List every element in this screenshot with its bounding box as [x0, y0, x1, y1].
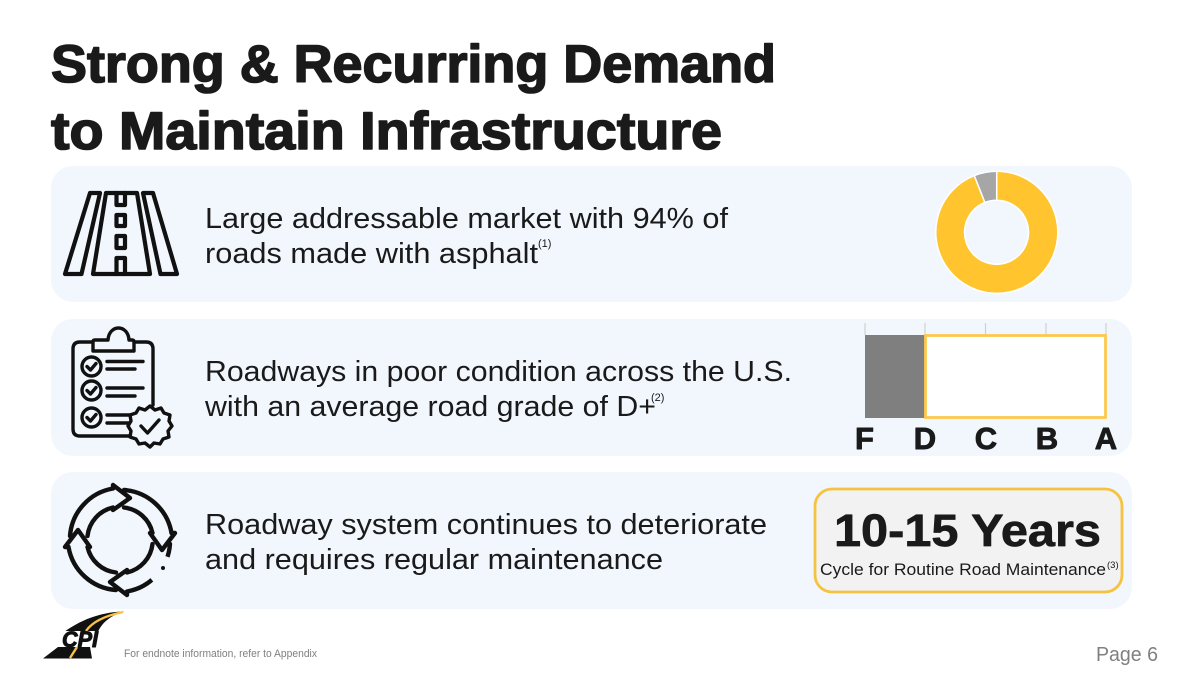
callout: maintenance cycle years: [815, 489, 1122, 592]
text: market description: roads made with asphalt: [205, 238, 538, 270]
title: [51, 35, 776, 161]
title: Strong & Recurring Demand: [51, 35, 776, 94]
text: market description: Large addressable market with 94% of: [205, 203, 729, 235]
bar chart: road grade scale: [855, 323, 1117, 456]
panel: road grade: [51, 319, 1132, 456]
icon: circular arrows: [65, 485, 175, 595]
panel: maintenance cycle: [51, 472, 1132, 609]
grade labels: F: [855, 421, 874, 456]
footnote: For endnote information, refer to Appendix: [124, 648, 317, 660]
icon: clipboard checklist: [73, 328, 172, 447]
text: deterioration description: [205, 509, 767, 576]
text: road condition description: Roadways in poor condition across the U.S.: [205, 356, 792, 388]
panel: asphalt market: [51, 166, 1132, 302]
grade labels: A: [1095, 421, 1117, 456]
page number: Page 6: [1096, 644, 1158, 666]
donut chart: 94% asphalt: [936, 171, 1058, 293]
logo: CPI road: [43, 612, 124, 658]
text: deterioration description: Roadway system continues to deteriorate: [205, 509, 767, 541]
logo: CPI road: CPI: [62, 627, 99, 652]
callout: maintenance cycle years: (3): [1107, 560, 1119, 571]
grade labels: D: [914, 421, 936, 456]
grade labels: B: [1036, 421, 1058, 456]
text: road condition description: [204, 356, 792, 423]
text: road condition description: with an average road grade of D+: [204, 391, 656, 423]
text: road condition description: (2): [651, 392, 664, 404]
callout: maintenance cycle years: Cycle for Routine Road Maintenance: [820, 560, 1106, 579]
grade labels: C: [975, 421, 997, 456]
text: deterioration description: and requires regular maintenance: [205, 544, 663, 576]
title: to Maintain Infrastructure: [51, 102, 722, 161]
icon: road: [65, 193, 177, 274]
text: market description: (1): [538, 238, 551, 250]
text: market description: [205, 203, 729, 270]
grade labels: [855, 421, 1117, 456]
callout: maintenance cycle years: 10-15 Years: [834, 505, 1101, 556]
